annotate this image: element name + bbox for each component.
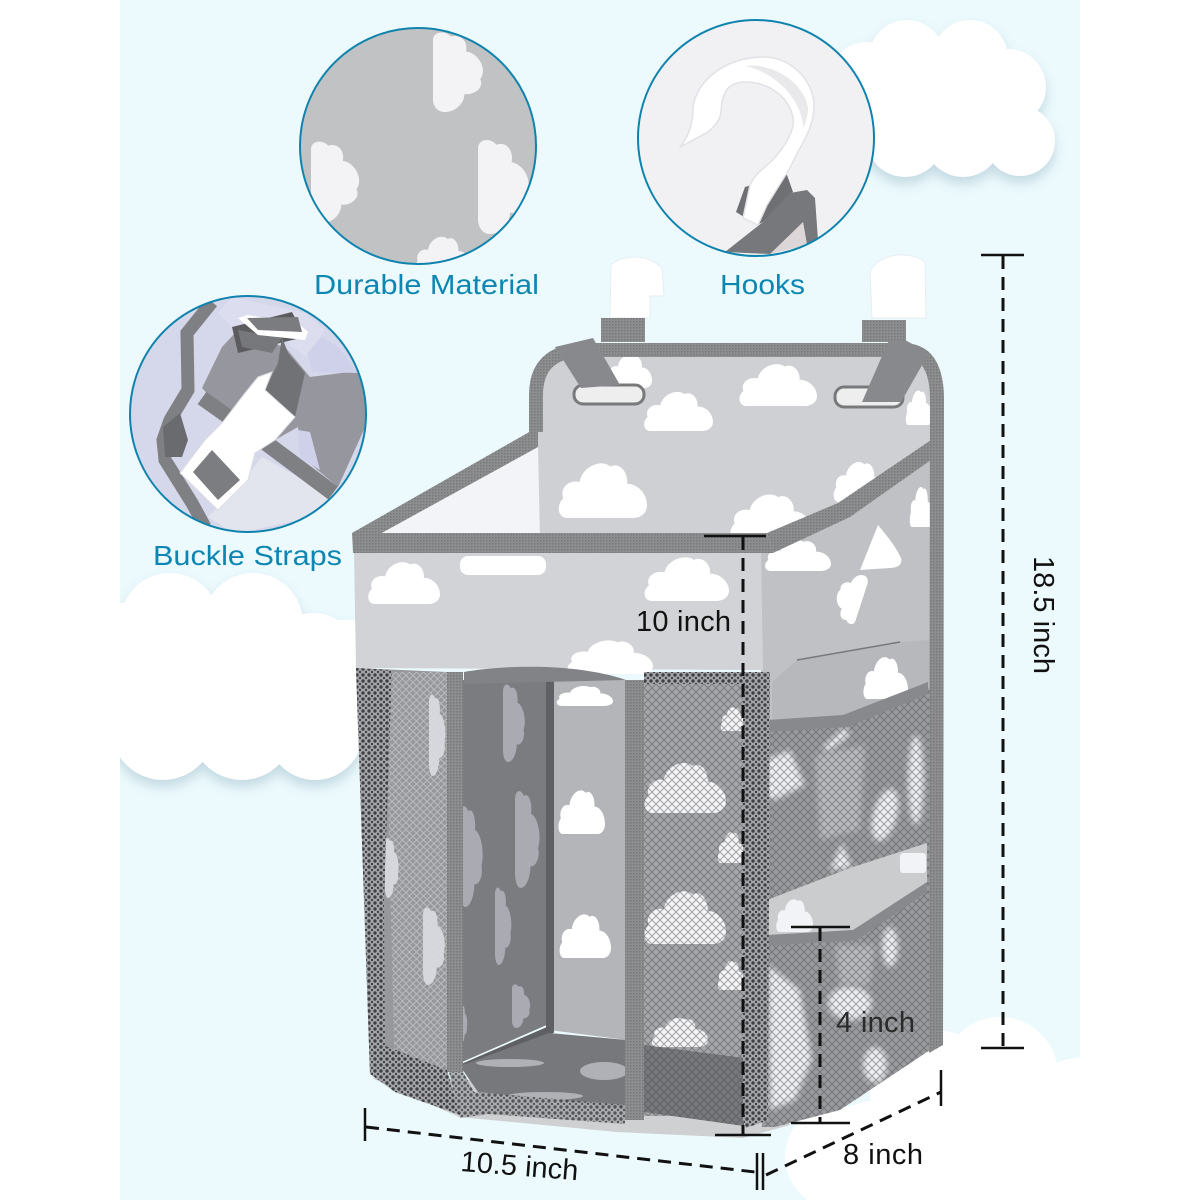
right mesh clouds	[645, 707, 746, 1047]
strap loop	[725, 175, 818, 254]
side pocket mesh	[762, 688, 930, 1127]
hook shading	[745, 66, 808, 128]
label: buckle straps: Buckle Straps	[153, 540, 342, 571]
detail circle: hooks	[638, 20, 874, 256]
product: hanging organizer	[352, 255, 944, 1138]
side pocket body	[762, 688, 930, 1127]
interior corner seam	[462, 680, 550, 1068]
strap to buckle	[265, 337, 305, 417]
straps	[555, 338, 929, 402]
dimension: 10.5 inch	[365, 1108, 757, 1190]
inner pocket panel	[772, 640, 930, 724]
back panel fabric	[538, 350, 938, 540]
right mesh panel	[644, 680, 744, 1116]
inner pocket seam	[797, 642, 900, 660]
dimension: 10 inch	[636, 536, 771, 1135]
interior back clouds	[557, 686, 613, 958]
dimension: 4 inch: 4 inch	[836, 1007, 915, 1039]
dimension: 10 inch: 10 inch	[636, 606, 731, 638]
white buckle	[180, 372, 295, 510]
label: durable material: Durable Material	[314, 269, 539, 300]
lavender cloud fabric	[218, 297, 325, 357]
inner pocket cloud	[863, 657, 908, 699]
background cloud: top right	[828, 20, 1055, 184]
back panel clouds	[559, 355, 932, 540]
white patches behind lower pocket	[776, 853, 926, 932]
gray fabric panel	[202, 333, 367, 487]
lower right mesh panel	[644, 1045, 744, 1126]
interior wall clouds	[460, 684, 540, 1043]
rings	[574, 385, 903, 407]
background cloud: bottom right	[785, 1017, 1153, 1200]
side pocket lighter folds	[815, 745, 875, 985]
bottom fabric skirt	[372, 1078, 790, 1138]
side pocket contents	[765, 727, 924, 1110]
dimension: 18.5 inch: 18.5 inch	[1027, 556, 1059, 674]
interior back wall	[549, 680, 627, 1040]
dimension: 8 inch	[763, 1070, 941, 1190]
top binding	[536, 350, 905, 432]
inner white lining	[372, 445, 540, 540]
lower pocket band	[767, 882, 927, 946]
hanging hooks	[601, 255, 926, 342]
front panel	[354, 553, 763, 670]
corner strap	[743, 672, 770, 1128]
main straps	[163, 302, 333, 527]
top mesh edge	[644, 672, 744, 684]
right mesh overlay	[644, 680, 744, 1116]
metal ring and slider	[232, 312, 308, 353]
detail circle: buckle straps	[130, 296, 367, 534]
right vertical strap	[625, 680, 644, 1120]
top centre binding	[464, 667, 626, 684]
right rising binding	[767, 440, 931, 553]
detail circle: durable material	[300, 28, 536, 275]
left vertical strap	[447, 672, 463, 1072]
right side clouds	[765, 487, 933, 625]
floor clouds	[476, 1059, 628, 1100]
dimension: 4 inch	[791, 927, 915, 1123]
left mesh panel	[356, 668, 447, 1100]
front panel clouds	[368, 556, 729, 674]
upper pocket band	[767, 682, 928, 732]
lower left mesh corner	[370, 1040, 460, 1115]
background cloud: left	[111, 573, 363, 787]
right side panel	[761, 460, 931, 730]
white lining	[208, 457, 335, 534]
dimension: 8 inch: 8 inch	[843, 1139, 923, 1171]
dimension: 18.5 inch	[981, 255, 1059, 1048]
lower pocket fabric strip	[767, 843, 927, 936]
floor	[460, 1033, 627, 1108]
right edge binding	[905, 343, 944, 1053]
left mesh clouds	[385, 695, 445, 985]
dimension: 10.5 inch: 10.5 inch	[459, 1146, 580, 1187]
left mesh overlay	[385, 672, 447, 1100]
front lower band	[447, 1064, 625, 1124]
interior dark left wall	[462, 680, 549, 1062]
white hook	[680, 57, 814, 225]
front binding	[352, 533, 773, 553]
left mesh edge	[356, 668, 392, 1082]
left flap binding	[352, 427, 538, 535]
background panel	[120, 0, 1080, 1200]
label: hooks: Hooks	[720, 269, 805, 300]
